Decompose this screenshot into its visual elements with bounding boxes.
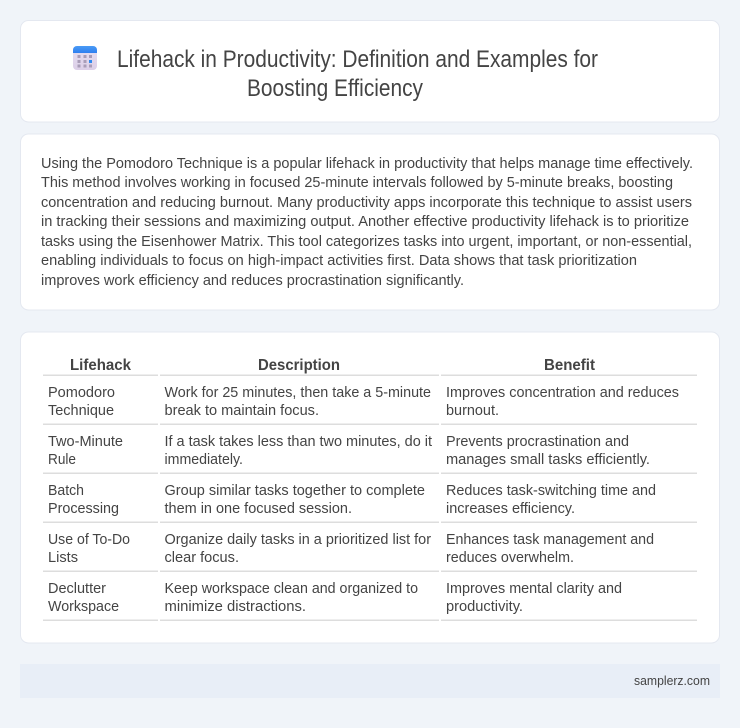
text block: introduction paragraph: tasks using the Eisenhower Matrix. This tool categorizes tasks into urgent, important, or non-essential,: [41, 234, 692, 250]
text block: introduction paragraph: [41, 156, 693, 289]
title: Lifehack in Productivity: Definition and Examples for: [117, 46, 598, 73]
table row: Pomodoro Technique: Improves concentration and reduces: [446, 385, 679, 401]
table row: Declutter Workspace: Improves mental clarity and: [446, 581, 622, 597]
table row: Two-Minute Rule: Rule: [48, 452, 76, 468]
table row: Two-Minute Rule: Prevents procrastination and: [446, 434, 629, 450]
table row: Pomodoro Technique: Pomodoro: [48, 385, 115, 401]
text block: introduction paragraph: improves work efficiency and reduces procrastination significantly.: [41, 273, 464, 289]
table row: Use of To-Do Lists: clear focus.: [164, 550, 239, 566]
table header row: Description: [258, 357, 340, 374]
table row: Declutter Workspace: [43, 581, 697, 621]
footer: [20, 664, 720, 698]
panel: title header: [20, 20, 720, 122]
table row: Batch Processing: [43, 483, 697, 523]
title: Boosting Efficiency: [247, 75, 423, 102]
table row: Declutter Workspace: minimize distractions.: [164, 599, 306, 615]
table row: Batch Processing: them in one focused session.: [164, 501, 352, 517]
text block: introduction paragraph: Using the Pomodoro Technique is a popular lifehack in productivity that helps manage time effectively.: [41, 156, 693, 172]
table row: Use of To-Do Lists: reduces overwhelm.: [446, 550, 574, 566]
table row: Use of To-Do Lists: Organize daily tasks in a prioritized list for: [164, 532, 431, 548]
table row: Two-Minute Rule: manages small tasks efficiently.: [446, 452, 650, 468]
table row: Two-Minute Rule: If a task takes less than two minutes, do it: [164, 434, 432, 450]
table row: Pomodoro Technique: break to maintain focus.: [164, 403, 319, 419]
text block: introduction paragraph: in tracking their sessions and maximizing output. Another effective productivity lifehack is to prioritize: [41, 214, 689, 230]
title: [117, 46, 598, 102]
footer: samplerz.com: [634, 673, 710, 688]
table header row: [43, 357, 697, 376]
table row: Batch Processing: Processing: [48, 501, 119, 517]
table row: Declutter Workspace: Workspace: [48, 599, 119, 615]
table header row: Lifehack: [70, 357, 131, 374]
text block: introduction paragraph: This method involves working in focused 25-minute intervals followed by 5-minute breaks, boosting: [41, 175, 673, 191]
panel: lifehack table: [20, 332, 720, 643]
table row: Batch Processing: Group similar tasks together to complete: [164, 483, 425, 499]
text block: introduction paragraph: concentration and reducing burnout. Many productivity apps incorporate this technique to assist users: [41, 195, 692, 211]
table header row: Benefit: [544, 357, 596, 374]
table row: Use of To-Do Lists: Lists: [48, 550, 78, 566]
panel: introduction: [20, 134, 720, 310]
table row: Batch Processing: Reduces task-switching time and: [446, 483, 656, 499]
table row: Pomodoro Technique: burnout.: [446, 403, 499, 419]
table row: Two-Minute Rule: Two-Minute: [48, 434, 123, 450]
icon: calendar: [73, 46, 97, 70]
table row: Two-Minute Rule: [43, 434, 697, 474]
table row: Use of To-Do Lists: Enhances task management and: [446, 532, 654, 548]
table row: Pomodoro Technique: Work for 25 minutes, then take a 5-minute: [164, 385, 431, 401]
table row: Use of To-Do Lists: Use of To-Do: [48, 532, 130, 548]
table row: Use of To-Do Lists: [43, 532, 697, 572]
table row: Pomodoro Technique: [43, 385, 697, 425]
table row: Pomodoro Technique: Technique: [48, 403, 114, 419]
table row: Declutter Workspace: Keep workspace clean and organized to: [164, 581, 418, 597]
table row: Two-Minute Rule: immediately.: [164, 452, 243, 468]
table row: Declutter Workspace: productivity.: [446, 599, 523, 615]
table row: Batch Processing: Batch: [48, 483, 84, 499]
text block: introduction paragraph: enabling individuals to focus on high-impact activities first. Data shows that task prioritization: [41, 253, 637, 269]
table row: Batch Processing: increases efficiency.: [446, 501, 575, 517]
table row: Declutter Workspace: Declutter: [48, 581, 106, 597]
